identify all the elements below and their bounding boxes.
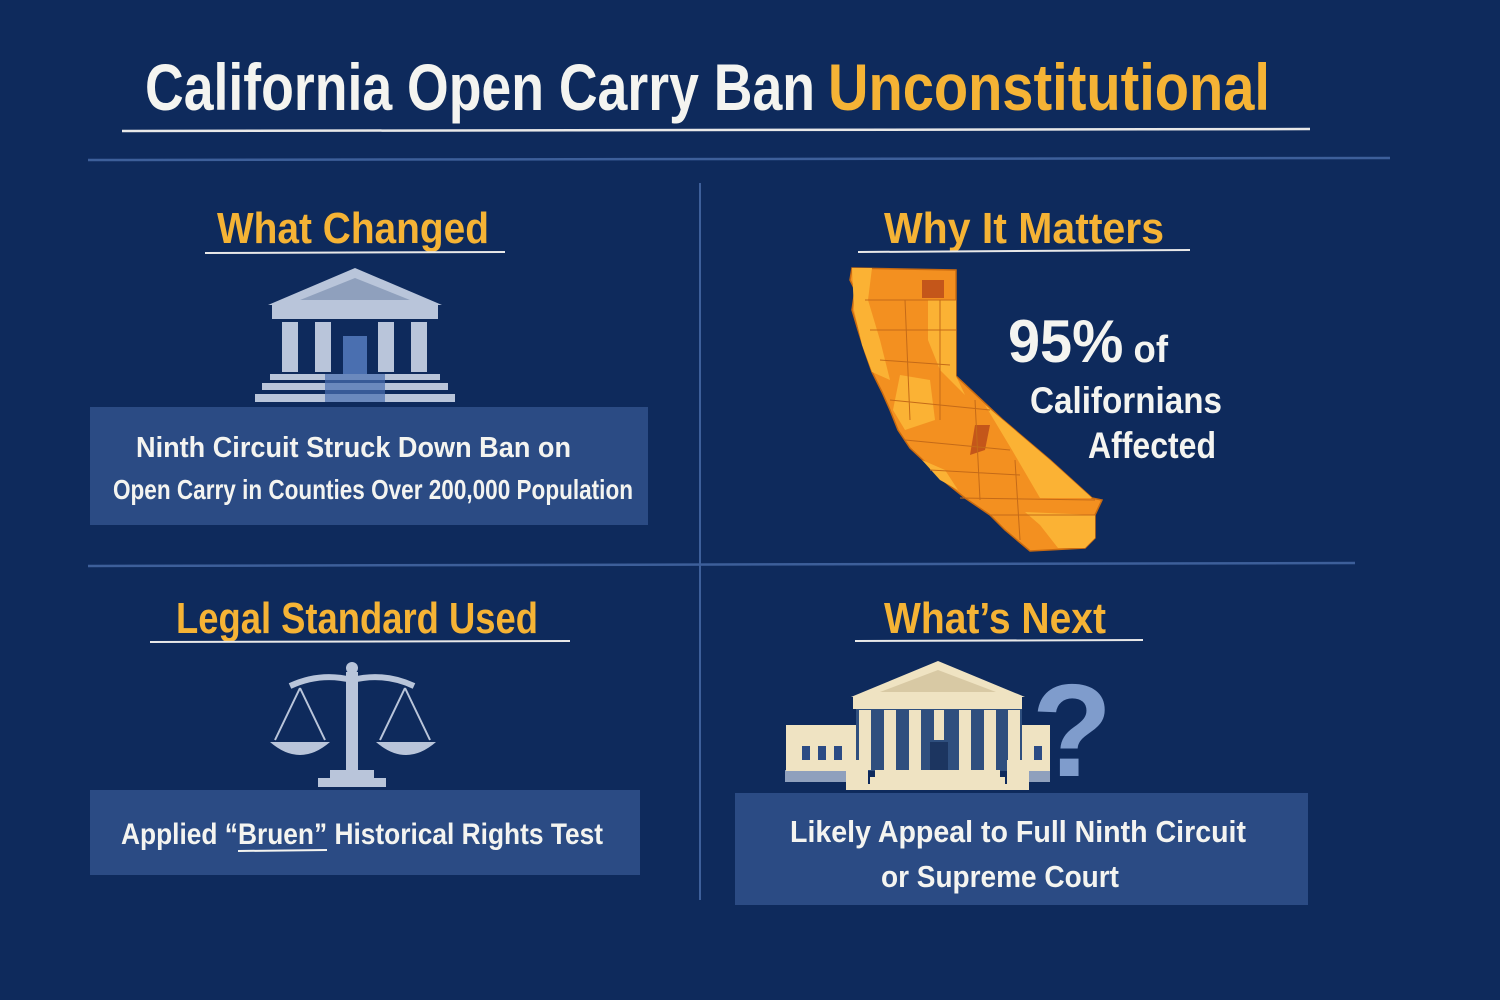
title: California Open Carry Ban: [145, 50, 815, 124]
text box: ruling: Ninth Circuit Struck Down Ban on: [136, 432, 571, 464]
text box: bruen test: Applied “Bruen” Historical Rights Test: [121, 818, 603, 851]
panel: what changed: [90, 204, 648, 525]
heading: what's next: What’s Next: [884, 594, 1106, 643]
stat: 95% of Californians affected: Californians: [1030, 380, 1222, 421]
panel: legal standard: [90, 594, 640, 875]
text box: ruling: Open Carry in Counties Over 200,000 Population: [113, 474, 633, 505]
title: Unconstitutional: [828, 50, 1270, 124]
text box: likely appeal: [735, 793, 1308, 905]
stat: 95% of Californians affected: 95% of: [1008, 308, 1168, 375]
text box: likely appeal: or Supreme Court: [881, 859, 1119, 894]
text box: bruen test: [90, 790, 640, 875]
text box: ruling: [90, 407, 648, 525]
icon: courthouse: [255, 268, 455, 402]
icon: supreme court: [785, 661, 1050, 790]
heading: why it matters: Why It Matters: [884, 204, 1164, 253]
stat: 95% of Californians affected: Affected: [1088, 425, 1216, 466]
panel: what's next: [735, 594, 1308, 905]
title: [122, 50, 1310, 131]
heading: legal standard used: Legal Standard Used: [176, 594, 538, 643]
icon: scales of justice: [270, 662, 436, 787]
heading: what changed: What Changed: [217, 204, 489, 253]
icon: question mark: ?: [1032, 657, 1112, 804]
panel: why it matters: [850, 204, 1222, 551]
map: california: [850, 268, 1102, 551]
text box: likely appeal: Likely Appeal to Full Ninth Circuit: [790, 814, 1246, 849]
stat: 95% of Californians affected: [1008, 308, 1222, 466]
